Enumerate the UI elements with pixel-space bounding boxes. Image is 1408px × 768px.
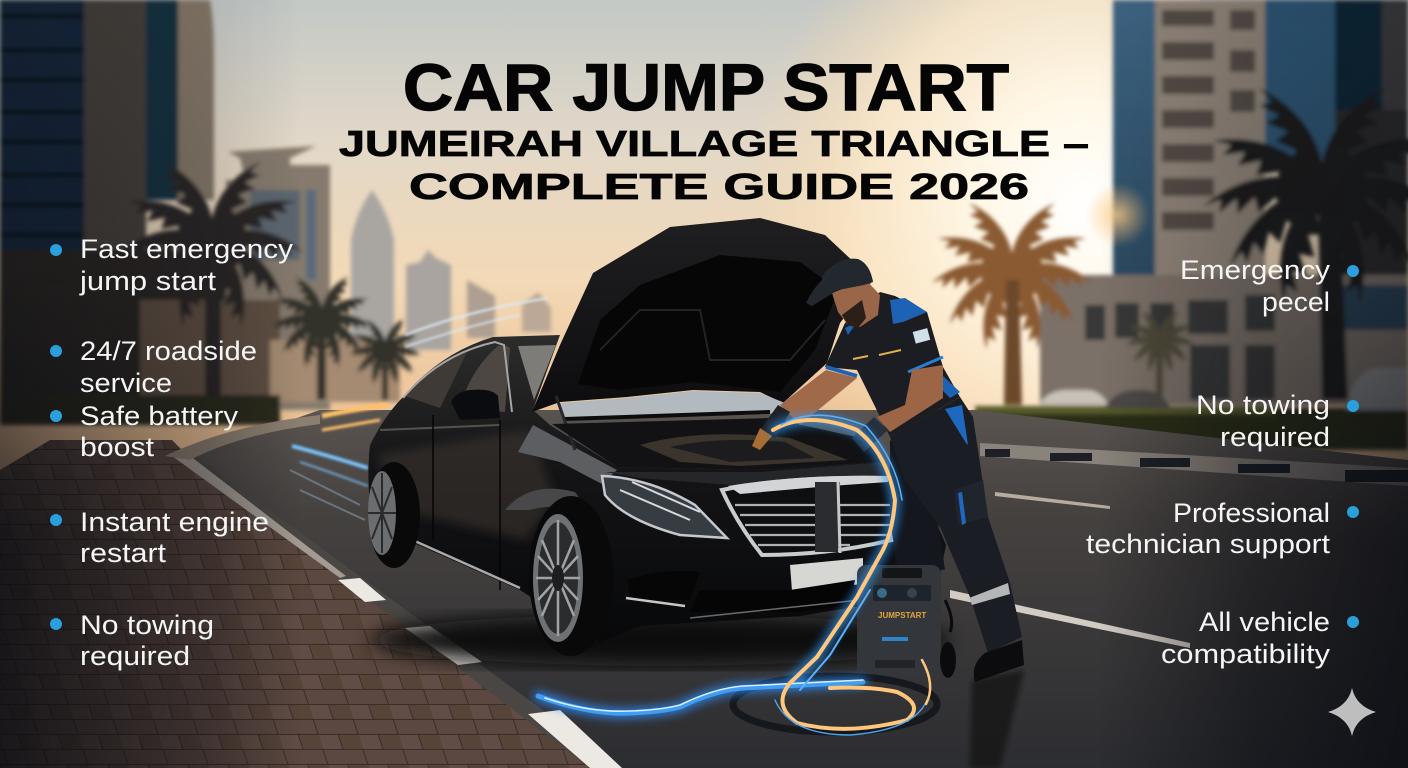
left tower xyxy=(0,0,400,402)
item: instant engine restart: restart xyxy=(80,538,167,568)
item: fast emergency jump start xyxy=(50,234,294,296)
subtitle line 2: COMPLETE GUIDE 2026 xyxy=(409,166,1029,207)
right curb xyxy=(980,443,1408,486)
light streaks xyxy=(292,298,548,486)
license plate xyxy=(790,558,863,591)
hood open xyxy=(532,218,873,412)
lower bumper xyxy=(628,571,700,600)
item: professional technician support: Professional xyxy=(1173,498,1330,528)
title block xyxy=(339,50,1089,207)
item: all vehicle compatibility xyxy=(1161,607,1359,669)
dark loop xyxy=(733,676,937,732)
item: 24/7 roadside service: service xyxy=(80,368,172,398)
item: 24/7 roadside service xyxy=(50,336,257,398)
item: fast emergency jump start: jump start xyxy=(79,266,217,296)
far side of car xyxy=(880,470,946,590)
hedges and parked cars xyxy=(0,368,1408,450)
torso xyxy=(825,292,960,437)
left benefits list xyxy=(50,234,294,671)
sidewalk pavement xyxy=(0,415,622,768)
car xyxy=(368,218,950,666)
car shadow xyxy=(370,614,950,666)
grille xyxy=(722,478,892,555)
item: instant engine restart: Instant engine xyxy=(80,507,269,537)
item: professional technician support xyxy=(1086,498,1359,559)
item: no towing required xyxy=(50,610,214,671)
gloves xyxy=(760,405,790,438)
front wheel xyxy=(529,496,613,656)
item: 24/7 roadside service: 24/7 roadside xyxy=(80,336,257,366)
jump starter unit: JUMPSTART xyxy=(878,611,926,620)
upper front edge xyxy=(605,462,892,485)
item: all vehicle compatibility: compatibility xyxy=(1161,639,1331,669)
title: CAR JUMP START xyxy=(403,50,1009,124)
item: emergency pecel: pecel xyxy=(1262,287,1330,317)
icon: sparkle xyxy=(1328,688,1376,736)
subtitle line 1: JUMEIRAH VILLAGE TRIANGLE – xyxy=(339,123,1089,164)
item: emergency pecel xyxy=(1180,255,1359,317)
sill chrome xyxy=(408,538,520,588)
item: fast emergency jump start: Fast emergency xyxy=(80,234,294,264)
item: all vehicle compatibility: All vehicle xyxy=(1199,607,1330,637)
item: no towing required: No towing xyxy=(1196,390,1330,420)
engine bay xyxy=(552,418,880,470)
pocket and reflective stripe xyxy=(954,480,988,525)
right towers xyxy=(1040,0,1408,405)
side windows xyxy=(403,342,556,412)
item: no towing required: No towing xyxy=(80,610,214,640)
item: no towing required: required xyxy=(80,641,190,671)
fender highlight xyxy=(518,425,617,484)
headlight xyxy=(602,476,727,538)
door lines xyxy=(433,415,500,590)
windshield glimpse xyxy=(560,391,790,420)
arm right xyxy=(877,365,943,432)
shoulder panel xyxy=(890,298,927,324)
mirror xyxy=(451,390,500,420)
front leg xyxy=(890,397,1022,653)
item: safe battery boost: Safe battery xyxy=(80,401,239,431)
item: no towing required xyxy=(1196,390,1359,452)
badge and name tapes xyxy=(853,328,930,359)
arm left xyxy=(780,370,857,425)
door reflections xyxy=(378,430,555,540)
road xyxy=(170,410,1408,768)
background: blurred city xyxy=(0,0,1408,450)
cap xyxy=(806,259,873,306)
item: instant engine restart xyxy=(50,507,269,568)
item: safe battery boost: boost xyxy=(80,432,155,462)
car body xyxy=(368,335,895,642)
rear wheel xyxy=(368,462,420,568)
palm trees xyxy=(119,77,1408,405)
item: safe battery boost xyxy=(50,401,239,462)
technician xyxy=(752,259,1024,768)
item: professional technician support: technician support xyxy=(1086,529,1331,559)
rear leg xyxy=(890,440,945,570)
boot xyxy=(974,640,1024,682)
distant skyline xyxy=(226,146,551,410)
right benefits list xyxy=(1086,255,1359,669)
tech ground shadow xyxy=(970,670,1024,768)
item: emergency pecel: Emergency xyxy=(1180,255,1331,285)
head xyxy=(832,280,880,327)
jump starter unit xyxy=(857,565,956,678)
background: sky xyxy=(0,0,1408,470)
hood inner panel xyxy=(578,255,838,392)
glowing cable xyxy=(538,415,937,735)
item: no towing required: required xyxy=(1220,422,1330,452)
